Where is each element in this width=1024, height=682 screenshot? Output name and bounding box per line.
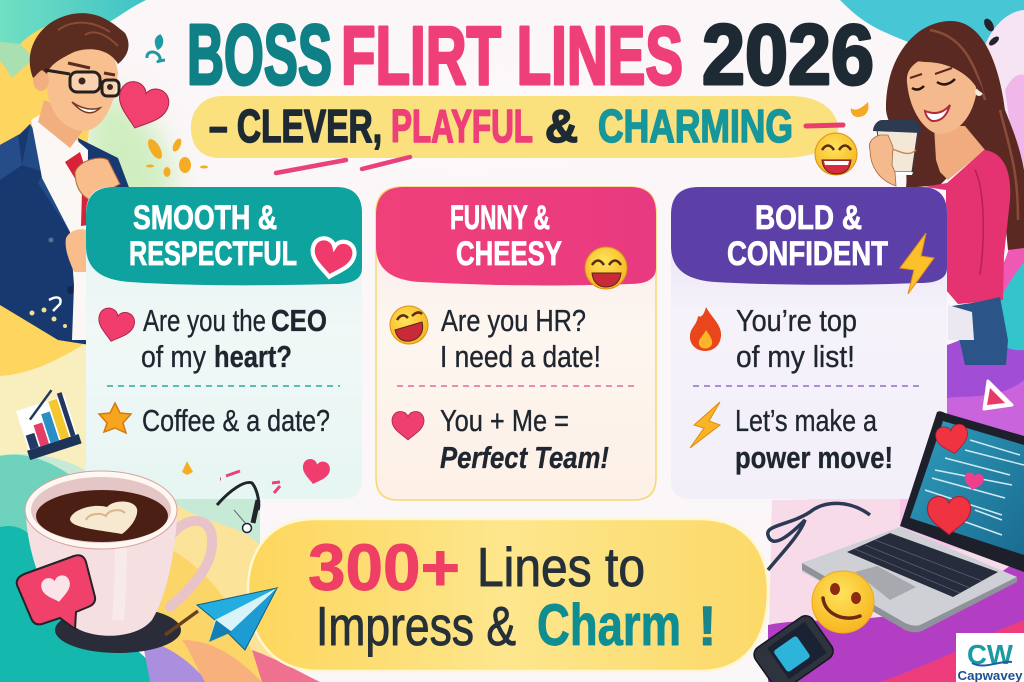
icon: laughing emoji: [386, 302, 432, 348]
icon: stethoscope clip: [217, 482, 259, 532]
logo: Capwavey: [956, 633, 1024, 682]
line text: You + Me =: [440, 403, 569, 438]
callout text: [308, 530, 717, 658]
panel: bold and confident: [671, 187, 947, 499]
line text: Coffee & a date?: [142, 403, 330, 438]
panel: bold and confident: of my list!: [736, 339, 855, 374]
top: [925, 150, 1010, 304]
callout text: Lines to: [477, 536, 645, 598]
face: [907, 57, 976, 134]
icon: header emoji: [585, 247, 627, 289]
icon: star: [99, 403, 131, 433]
icon: flame: [690, 307, 721, 351]
subtitle text: – CLEVER,: [209, 100, 382, 152]
subtitle text: PLAYFUL: [391, 100, 533, 152]
panel: smooth and respectful: CEO: [271, 303, 327, 338]
icon: heart badge: [308, 237, 356, 280]
panel: smooth and respectful: of my: [141, 339, 206, 374]
callout text: Charm: [537, 593, 681, 658]
line text: Are you the: [143, 303, 266, 338]
callout text: 300+: [308, 530, 460, 604]
coffee cup: [877, 130, 918, 172]
panel: bold and confident: CONFIDENT: [727, 235, 888, 273]
callout: 300+ lines: [248, 519, 768, 671]
head: [46, 44, 118, 131]
icon: coffee cup with latte art: [25, 471, 212, 653]
icon: lightning: [690, 402, 720, 448]
callout text: Impress &: [316, 595, 516, 657]
title: 2026: [702, 8, 874, 103]
header: [376, 187, 656, 285]
panel: smooth and respectful: [86, 187, 362, 499]
subtitle text: &: [545, 100, 578, 152]
icon: triangle heart: [984, 381, 1012, 409]
icon: laptop with hearts: [802, 411, 1024, 632]
panel: funny and cheesy: [376, 187, 656, 500]
icon: like bubble: [17, 555, 95, 629]
hands: [75, 158, 120, 200]
hand: [869, 135, 896, 186]
heading: BOLD &: [755, 199, 862, 237]
line text: You’re top: [736, 303, 857, 338]
panel: smooth and respectful: RESPECTFUL: [129, 235, 297, 273]
heading: FUNNY &: [450, 199, 550, 237]
icon: cable: [768, 503, 870, 570]
neck: [38, 100, 85, 148]
callout text: !: [698, 594, 717, 657]
line text: Let’s make a: [735, 403, 878, 438]
hair: [886, 21, 1024, 250]
neck and chest: [934, 126, 985, 180]
icon: laughing emoji top: [815, 133, 857, 175]
smile: [72, 102, 100, 113]
panel: funny and cheesy: Perfect Team!: [440, 440, 609, 475]
jacket: [0, 124, 90, 345]
panel: bold and confident: power move!: [735, 440, 893, 475]
logo: Capwavey: CW: [967, 639, 1014, 670]
shirt: [31, 112, 88, 340]
icon: smartphone: [751, 612, 837, 682]
glasses: [45, 70, 103, 82]
icon: orange splash: [145, 137, 208, 177]
icon: top-right marks: [982, 17, 1001, 47]
title: FLIRT LINES: [341, 9, 683, 102]
subtitle banner: [191, 96, 843, 173]
jeans: [952, 297, 1008, 365]
icon: growth chart: [12, 386, 82, 460]
icon: confetti: [182, 458, 331, 493]
icon: big heart near man: [111, 78, 172, 136]
header: [671, 187, 947, 285]
title: BOSS: [187, 8, 332, 103]
icon: heart: [94, 306, 137, 346]
heading: SMOOTH &: [133, 199, 277, 237]
icon: teal swirl: [147, 36, 165, 62]
icon: smiley: [812, 571, 874, 633]
header: [86, 187, 362, 285]
illustration: woman with coffee cup: [869, 21, 1024, 365]
icon: orange blob: [851, 102, 868, 117]
panel: funny and cheesy: CHEESY: [456, 235, 562, 273]
tie: [65, 152, 91, 226]
line text: Are you HR?: [441, 303, 586, 338]
subtitle text: [209, 100, 793, 152]
icon: heart: [392, 412, 424, 440]
panel: smooth and respectful: heart?: [214, 339, 292, 374]
panel: funny and cheesy: I need a date!: [440, 339, 601, 374]
icon: lightning header: [900, 233, 934, 294]
screen hearts: [934, 423, 971, 456]
illustration: man in navy suit: [0, 13, 130, 345]
subtitle text: CHARMING: [598, 100, 793, 152]
hair: [30, 13, 129, 78]
icon: paper plane: [165, 588, 277, 650]
